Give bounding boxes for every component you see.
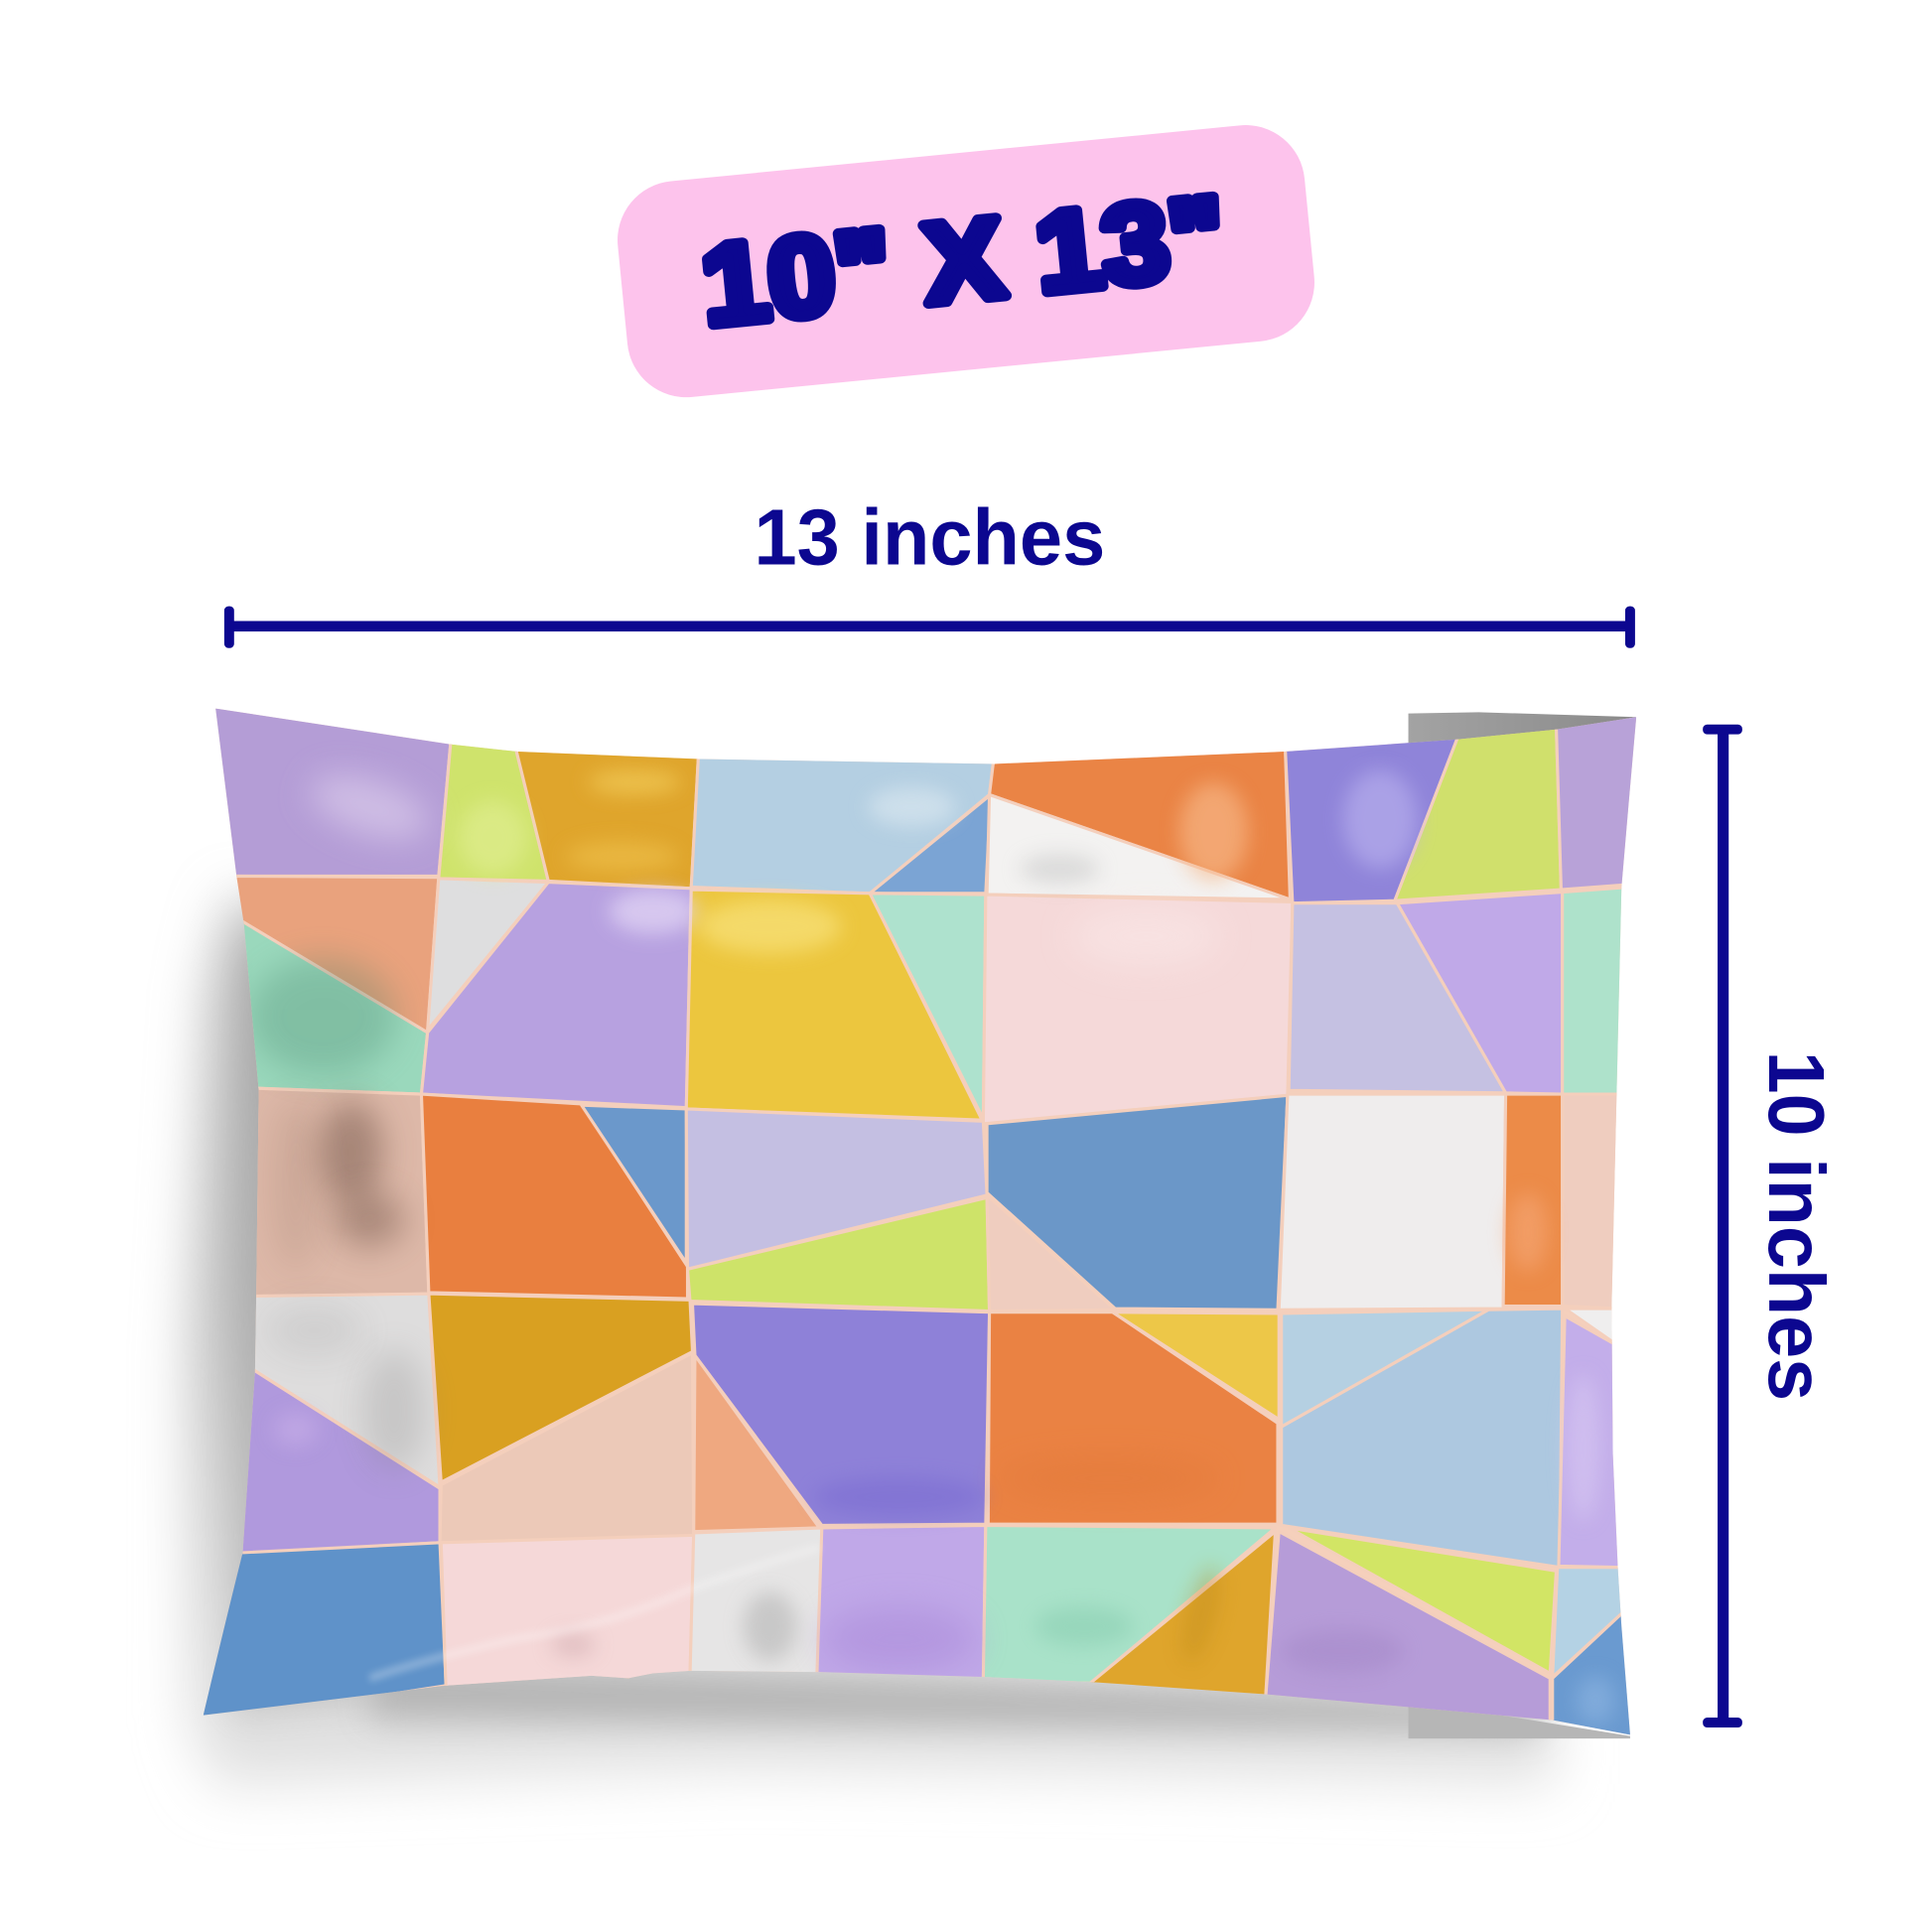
back flap: top gray fold xyxy=(1409,712,1636,747)
height dimension arrow xyxy=(1703,725,1742,1727)
pattern row 1 xyxy=(209,702,1641,903)
mailer with geometric pattern xyxy=(185,702,1651,1749)
pattern row 4 xyxy=(221,1294,1624,1568)
wrinkles and gloss on the plastic xyxy=(249,762,1615,1725)
width label: 13 inches xyxy=(755,492,1105,581)
pattern row 5 xyxy=(191,1525,1639,1743)
pattern row 2 xyxy=(228,876,1629,1124)
infographic canvas xyxy=(163,125,1827,1800)
mailer base xyxy=(185,702,1651,1749)
width dimension arrow xyxy=(224,607,1635,648)
pattern row 3 xyxy=(246,1088,1624,1311)
cast shadow of mailer xyxy=(191,899,1555,1787)
badge background xyxy=(613,120,1319,403)
badge title: 10" X 13" xyxy=(696,173,1231,349)
back flap: bottom gray fold xyxy=(1409,1701,1630,1738)
size badge xyxy=(613,120,1319,403)
height label: 10 inches xyxy=(1752,1051,1841,1401)
